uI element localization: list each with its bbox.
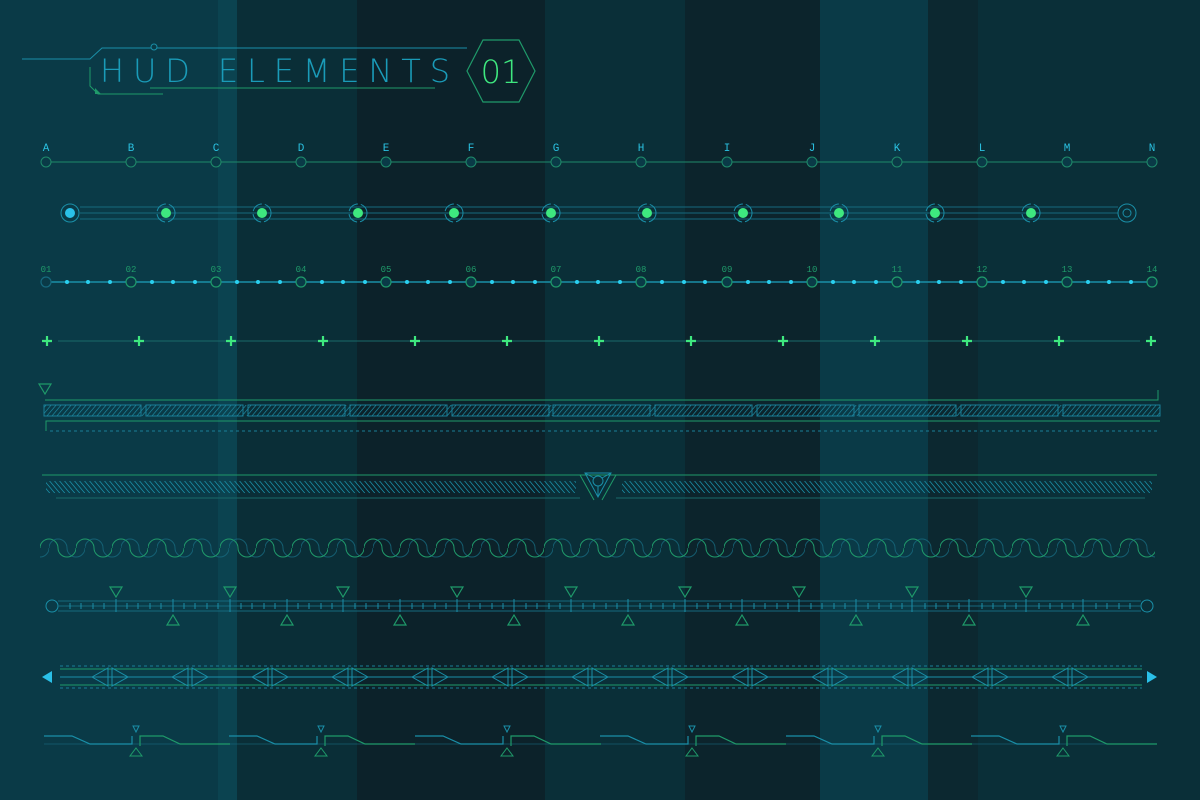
hexagon badge 01: 01 [481,53,521,91]
row: letter timeline: L [979,143,985,155]
icon: right arrow [1147,671,1157,683]
row: letter timeline: G [553,143,559,155]
row: numbered dotted timeline: 12 [977,265,987,275]
title text: HUD ELEMENTS [100,52,450,90]
row: letter timeline: N [1149,143,1155,155]
row: node chain [61,204,1136,222]
row: letter timeline: M [1064,143,1070,155]
row: numbered dotted timeline: 02 [126,265,136,275]
row: letter timeline: K [894,143,901,155]
row: letter timeline: D [298,143,305,155]
row: letter timeline: I [724,143,730,155]
row: numbered dotted timeline: 06 [466,265,476,275]
row: letter timeline: C [213,143,220,155]
row: numbered dotted timeline: 08 [636,265,646,275]
row: numbered dotted timeline [41,265,1157,287]
row: numbered dotted timeline: 14 [1147,265,1157,275]
row: stepped circuit line [44,726,1157,756]
row: wave [40,538,1155,558]
title block [22,40,535,102]
row: numbered dotted timeline: 09 [722,265,732,275]
row: ruler with markers [46,587,1153,625]
row: numbered dotted timeline: 11 [892,265,902,275]
row: numbered dotted timeline: 10 [807,265,817,275]
row: hazard segmented bar [39,384,1160,431]
hexagon badge 01 [467,40,535,102]
row: arrow rail with diamonds [42,666,1157,688]
icon: left arrow [42,671,52,683]
icon: center triangle emblem [580,473,616,500]
row: numbered dotted timeline: 03 [211,265,221,275]
row: plus markers [42,336,1156,346]
row: letter timeline: F [468,143,474,155]
row: letter timeline: H [638,143,644,155]
row: numbered dotted timeline: 04 [296,265,306,275]
row: numbered dotted timeline: 13 [1062,265,1072,275]
row: letter timeline: J [809,143,815,155]
row: letter timeline: A [43,143,50,155]
row: letter timeline: B [128,143,135,155]
row: numbered dotted timeline: 05 [381,265,391,275]
row: letter timeline: E [383,143,390,155]
row: numbered dotted timeline: 07 [551,265,561,275]
row: hatched divider with center emblem [42,473,1157,500]
row: letter timeline [41,143,1157,167]
row: numbered dotted timeline: 01 [41,265,51,275]
